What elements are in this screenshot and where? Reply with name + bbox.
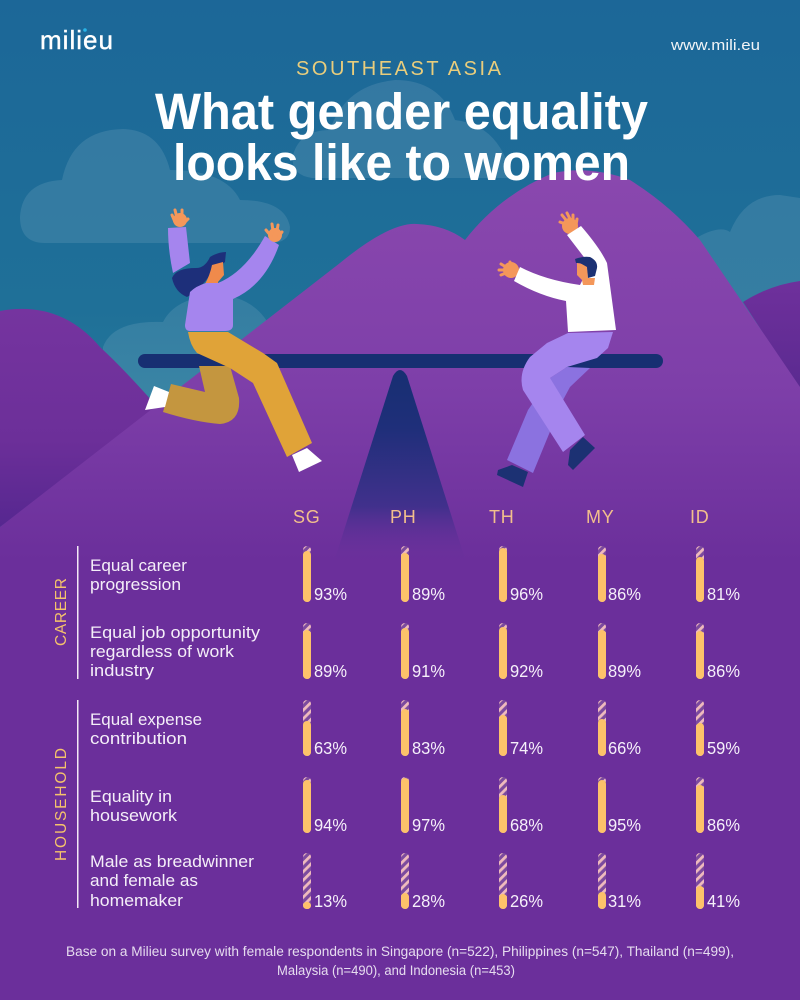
face and neck xyxy=(577,263,595,285)
column: PH: 89% xyxy=(412,584,445,604)
torso and right arm xyxy=(185,236,279,331)
column: SG: 13% xyxy=(314,891,347,911)
country headers: MY xyxy=(586,507,615,527)
white shirt xyxy=(514,226,616,332)
column: TH: 26% xyxy=(510,891,543,911)
background clouds xyxy=(20,80,800,420)
row labels: progression xyxy=(90,575,181,594)
hair xyxy=(172,252,226,297)
category: household: HOUSEHOLD xyxy=(53,748,70,861)
logo: milieu xyxy=(40,25,113,55)
row labels: industry xyxy=(90,661,155,680)
column: MY: 86% xyxy=(608,584,641,604)
column: SG: 94% xyxy=(314,815,347,835)
bar chart xyxy=(303,546,740,911)
country headers: SG xyxy=(293,507,321,527)
country headers: TH xyxy=(489,507,515,527)
row labels: contribution xyxy=(90,729,187,748)
row labels: Equal career xyxy=(90,556,187,575)
side hand xyxy=(499,262,519,278)
column: TH: 96% xyxy=(510,584,543,604)
background sky xyxy=(0,0,800,560)
category: career xyxy=(53,546,78,679)
column: ID: 86% xyxy=(707,661,740,681)
row labels: Equal expense xyxy=(90,710,202,729)
figure: man xyxy=(497,213,616,487)
column: ID: 86% xyxy=(707,815,740,835)
column: TH xyxy=(499,546,543,911)
hair xyxy=(575,257,597,278)
neck and face xyxy=(205,262,224,288)
row labels: Equality in xyxy=(90,787,172,806)
footnote xyxy=(66,944,734,978)
country headers: PH xyxy=(390,507,417,527)
seesaw xyxy=(138,354,663,565)
column: SG xyxy=(303,546,347,911)
column: ID: 41% xyxy=(707,891,740,911)
footnote: Malaysia (n=490), and Indonesia (n=453) xyxy=(277,963,515,978)
column: PH: 91% xyxy=(412,661,445,681)
back leg xyxy=(507,367,590,473)
front leg xyxy=(522,332,613,452)
row labels: homemaker xyxy=(90,891,183,910)
column: MY: 66% xyxy=(608,738,641,758)
country headers: ID xyxy=(690,507,710,527)
front shoe xyxy=(292,448,322,472)
column: TH: 74% xyxy=(510,738,543,758)
column: PH: 83% xyxy=(412,738,445,758)
front leg xyxy=(188,332,312,457)
row labels xyxy=(90,556,261,910)
category: career: CAREER xyxy=(53,578,70,646)
website url: www.mili.eu xyxy=(670,38,760,54)
country headers xyxy=(293,507,710,527)
left arm xyxy=(168,227,190,273)
column: PH: 97% xyxy=(412,815,445,835)
raised hand xyxy=(560,213,578,234)
column: SG: 93% xyxy=(314,584,347,604)
left hill xyxy=(0,309,160,527)
row labels: Male as breadwinner xyxy=(90,852,254,871)
column: MY: 31% xyxy=(608,891,641,911)
column: ID: 59% xyxy=(707,738,740,758)
column: ID: 81% xyxy=(707,584,740,604)
footnote: Base on a Milieu survey with female respondents in Singapore (n=522), Philippines (n=547), Thailand (n=499), xyxy=(66,944,734,959)
row labels: housework xyxy=(90,806,178,825)
title: looks like to women xyxy=(173,134,630,191)
column: TH: 68% xyxy=(510,815,543,835)
column: PH xyxy=(401,546,445,911)
column: ID xyxy=(696,546,740,911)
row labels: Equal job opportunity xyxy=(90,623,261,642)
title: What gender equality xyxy=(155,83,649,140)
title xyxy=(155,83,649,191)
right hand xyxy=(266,224,282,242)
column: MY: 89% xyxy=(608,661,641,681)
back shoe xyxy=(145,386,169,410)
right hill xyxy=(743,281,800,390)
left hand xyxy=(172,210,188,227)
beam xyxy=(138,354,663,368)
column: SG: 63% xyxy=(314,738,347,758)
column: TH: 92% xyxy=(510,661,543,681)
column: MY: 95% xyxy=(608,815,641,835)
column: PH: 28% xyxy=(412,891,445,911)
back shoe xyxy=(497,465,528,487)
fulcrum xyxy=(333,370,467,565)
column: MY xyxy=(598,546,641,911)
row labels: regardless of work xyxy=(90,642,235,661)
figure: woman xyxy=(145,210,322,472)
front shoe xyxy=(568,437,595,470)
eyebrow heading: SOUTHEAST ASIA xyxy=(296,58,502,80)
row labels: and female as xyxy=(90,871,198,890)
back leg xyxy=(163,366,239,424)
column: SG: 89% xyxy=(314,661,347,681)
